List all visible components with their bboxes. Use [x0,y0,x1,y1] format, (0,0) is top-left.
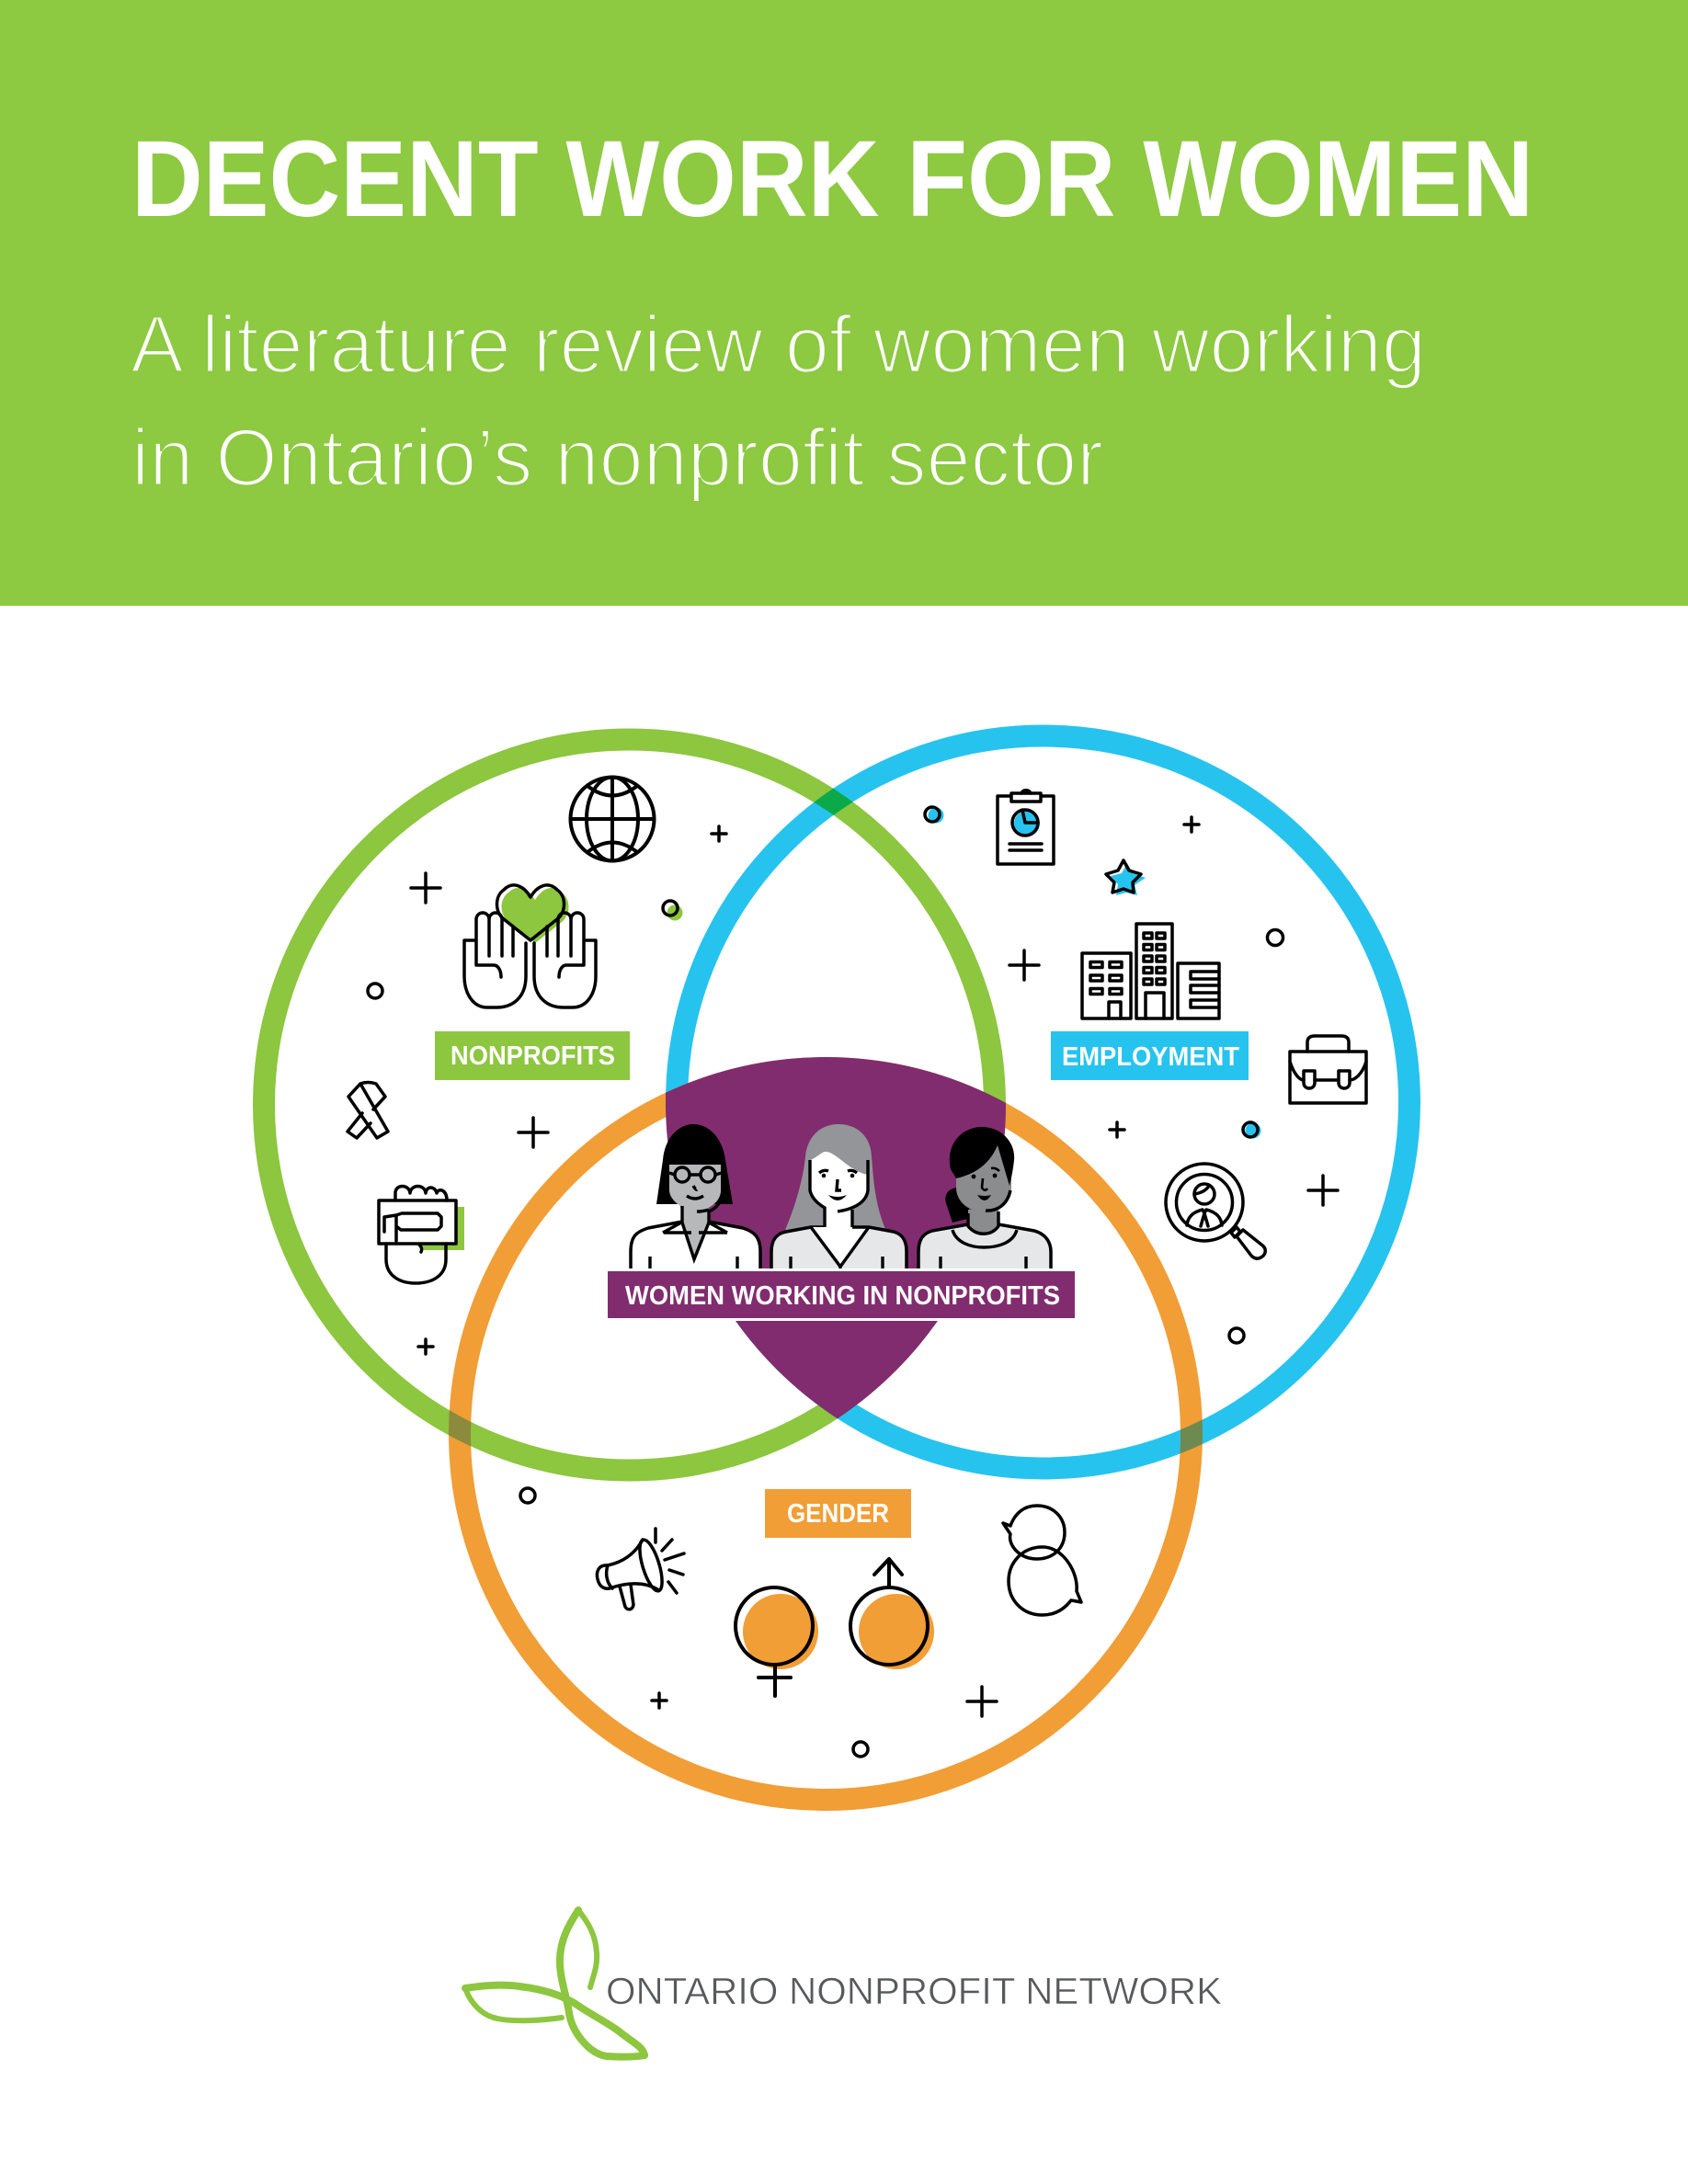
icon: male symbol [850,1559,934,1669]
venn diagram [264,735,1409,1811]
icon: megaphone [597,1529,684,1610]
icon: female symbol [736,1587,818,1696]
subtitle: in Ontario’s nonprofit sector [131,412,1103,503]
white band behind label [608,1268,1075,1321]
header banner [0,0,1688,606]
icon: star [1106,860,1146,895]
icon: hands with heart [464,885,596,1007]
ring overlaps [449,789,1203,1454]
icon: office buildings [1082,924,1219,1018]
logo wordmark: ONTARIO NONPROFIT NETWORK [606,1970,1222,2012]
woman with glasses [631,1124,760,1272]
woman with long hair [771,1124,907,1272]
icon: briefcase [1290,1036,1366,1103]
label: women working in nonprofits [608,1271,1075,1318]
label: women working in nonprofits: WOMEN WORKING IN NONPROFITS [625,1281,1060,1311]
title: DECENT WORK FOR WOMEN [131,119,1534,240]
subtitle: A literature review of women working [131,299,1426,390]
icon: magnifier with person [1166,1164,1265,1258]
icon: clipboard with pie chart [998,791,1054,864]
label: nonprofits [435,1031,630,1080]
icon: speech bubbles [1003,1506,1081,1615]
woman with hair bun [918,1127,1051,1272]
icon: fist with sign [379,1186,464,1283]
circle: gender [460,1068,1192,1800]
logo: Ontario Nonprofit Network [465,1910,1222,2057]
label: employment: EMPLOYMENT [1062,1042,1239,1072]
decorative marks: gender [520,1488,997,1757]
label: employment [1051,1031,1249,1080]
logo mark [465,1910,644,2057]
circle: nonprofits [264,739,995,1471]
subtitle [131,299,1426,503]
label: gender: GENDER [787,1499,889,1529]
decorative marks: employment [925,807,1338,1343]
icon: awareness ribbon [348,1083,388,1138]
decorative marks: nonprofits [368,826,726,1354]
circle: employment [677,735,1409,1469]
icon: globe [570,778,655,860]
label: gender [765,1489,911,1538]
label: nonprofits: NONPROFITS [451,1041,615,1071]
purple centre intersection [666,1057,1006,1419]
